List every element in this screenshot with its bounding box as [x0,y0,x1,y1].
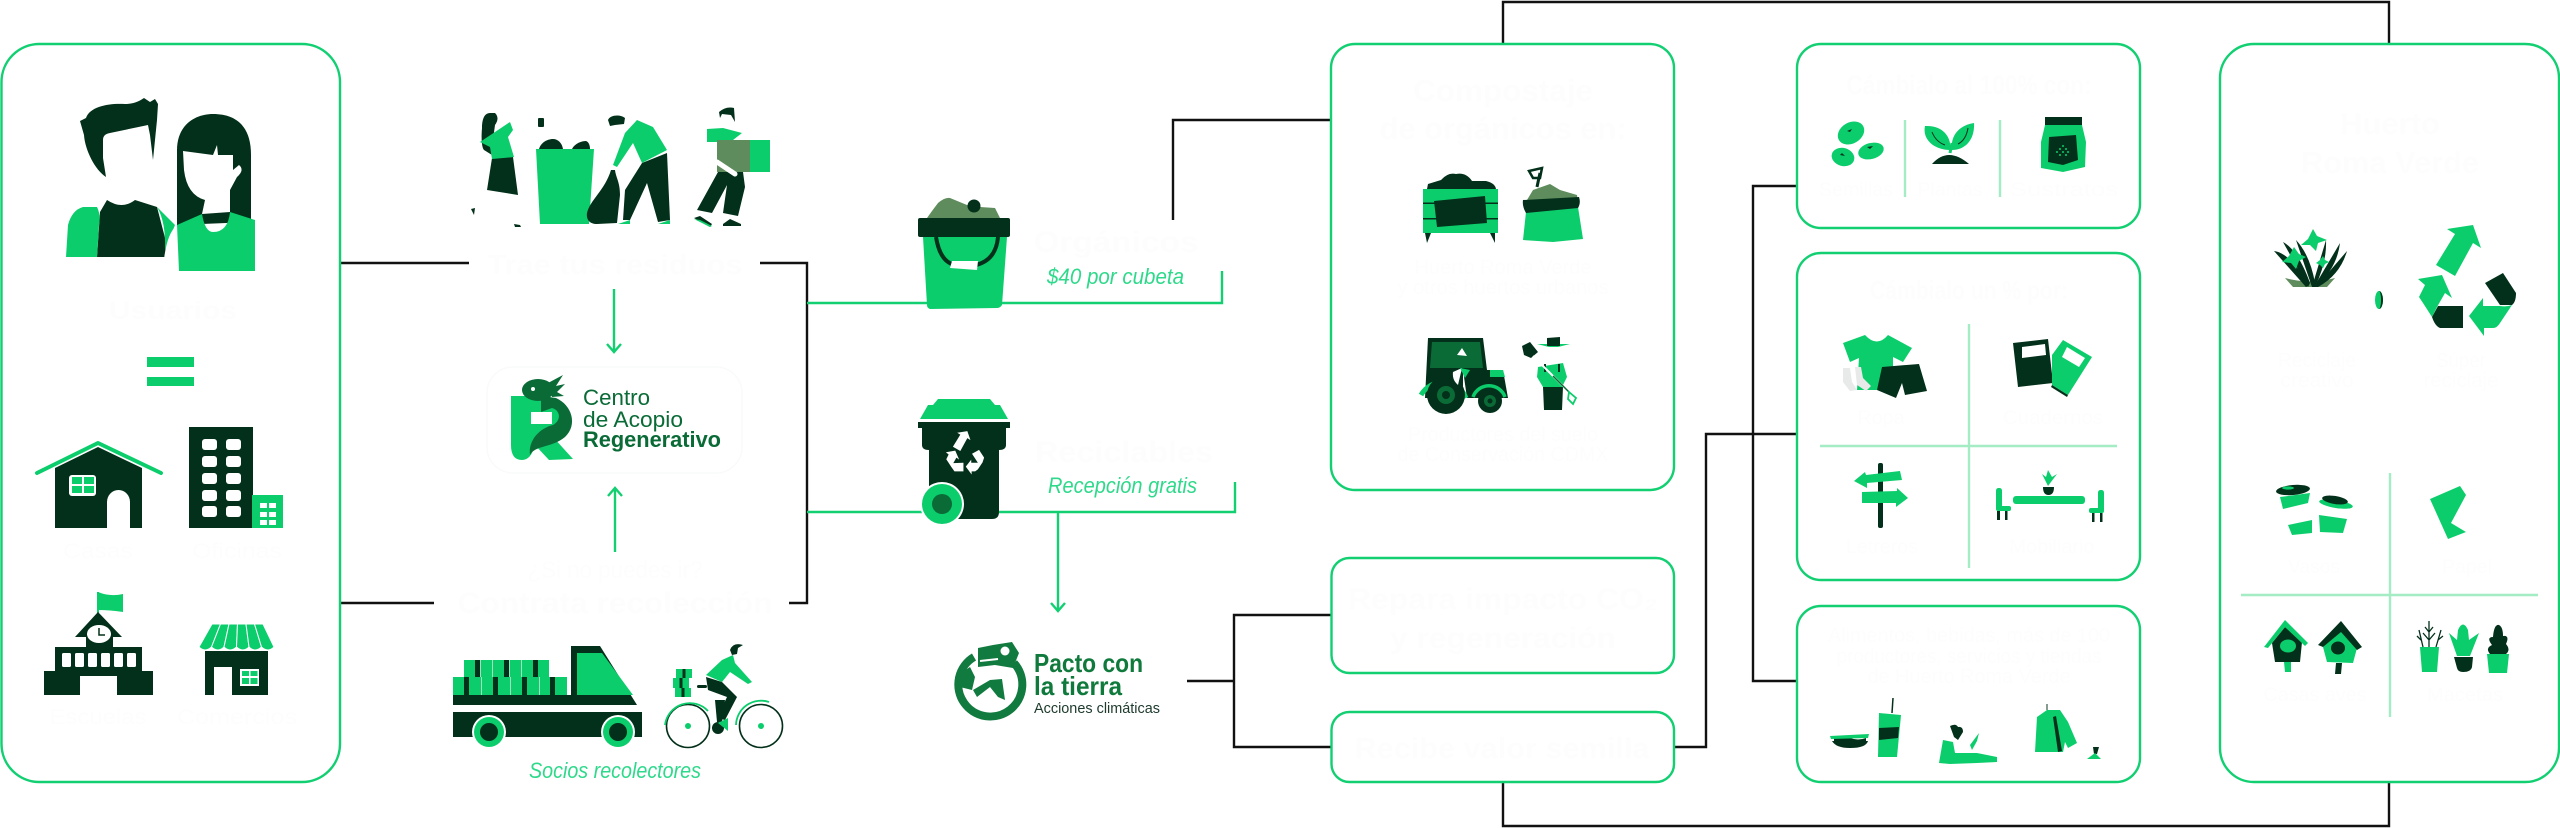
icon: man and woman [66,98,255,271]
label: reciclaje creativo: creativo [2280,370,2354,392]
logo text: Centro [583,385,650,410]
logo text: Acciones climáticas [1034,700,1160,717]
label: huerto roma verde: Huerto Roma Verde [1414,257,1592,279]
label: macetas: Macetas [2427,685,2503,706]
label: papel: Papel [2442,557,2492,578]
panel: cambialo un porcentaje [1797,253,2140,580]
heading: huerto roma verde [2301,106,2479,180]
icon: compost crate [1423,174,1498,243]
panel: huerto roma verde [2220,44,2559,782]
label: productores [1398,424,1608,466]
heading: huerto roma verde: Roma Verde [2301,145,2479,180]
logo: pacto con la tierra [955,642,1160,717]
panel: reparto [1332,558,1674,673]
labels: semillas plantas sustratos: Semillas [1819,180,1893,201]
label: comercios: Comercios [177,706,297,729]
panel: cambialo al 100 [1797,44,2140,228]
heading: trae tus residuos: Trae tus residuos [488,249,742,280]
icon: office building [189,427,283,528]
icon: signpost [1854,463,1908,528]
logo text: de Acopio [583,407,683,432]
logo: centro de acopio regenerativo [487,367,742,473]
caption: socios recolectores: Socios recolectores [529,758,701,783]
label: ropa: Ropa [1858,408,1905,429]
label: organicos [1034,226,1198,289]
heading: cambialo por: Cámbialo un % por: [1870,275,2068,305]
icon: substrate bag [2041,117,2086,172]
label: huerto roma verde [1398,257,1608,299]
price: 40 por cubeta: $40 por cubeta [1046,264,1184,289]
icon: flowering plant [2274,229,2347,287]
logo text [1034,648,1160,717]
label: super reciclaje: Súper [2436,350,2486,372]
logo text: Regenerativo [583,427,721,452]
label: huerto roma verde: y otros huertos urbanos [1398,277,1608,299]
connector lines: black flow [340,2,2389,826]
note: recepcion gratis: Recepción gratis [1048,473,1197,498]
logo text: Pacto con [1034,648,1143,678]
labels: semillas plantas sustratos: Plantas [1918,180,1982,201]
label: super reciclaje: reciclaje [2424,370,2498,392]
heading: contrata recoleccion: Contrata recolección [458,587,772,620]
text: repara impacto: Repara impacto CO₂ [1348,583,1658,616]
icon: school [44,592,153,695]
icon: shop [199,624,274,695]
heading: huerto roma verde: Huerto [2340,106,2440,141]
label: escuelas: Escuelas [50,706,146,729]
icon: notebooks [2013,339,2092,397]
label: reciclables: Reciclables [1035,436,1213,469]
label: productores: Productores del suelo [1408,424,1598,446]
icon: seedling [1925,123,1974,164]
labels: semillas plantas sustratos: Sustratos [2010,180,2118,201]
heading: compostaje [1380,73,1626,146]
labels: semillas plantas sustratos [1819,180,2118,201]
label: reciclaje creativo: Reciclaje [2278,350,2356,372]
icon: farmer with shovel [1522,337,1576,410]
icon: tractor [1421,338,1508,414]
icon: jacket and lamp [2035,704,2101,759]
label: cuadernos: Cuadernos [2003,408,2103,429]
icon: beans [1830,117,1886,169]
label: mobiliario: Mobiliario [2010,537,2094,558]
text: repara impacto: y regeneración [1390,622,1616,655]
panel: recibe valor [1332,712,1674,782]
icon: compost sack [1523,168,1583,242]
heading: usuarios: Usuarios [109,297,237,325]
text: recibe valor semilla: Recibe valor semilla [1354,733,1650,765]
icon: sandwich and cup [1830,698,1901,757]
icon: person reading [1939,725,1997,764]
label: reciclaje creativo [2278,350,2356,392]
logo emblem [511,375,573,460]
icon: house [37,443,161,528]
icon: birdhouses [2264,620,2362,674]
text: alimentos [1828,625,2110,688]
icon: recycling arrows [2418,225,2516,336]
connector lines: green flow [607,271,1235,611]
text: alimentos: Alimentos, bebidas, más de 100 [1828,625,2110,647]
heading: cambialo al 100: Cámbialo al 100% con: [1846,70,2092,100]
label: letreros: Letreros [1846,537,1918,558]
label: oficinas: Oficinas [192,540,282,563]
panel: compostaje de organicos [1331,44,1674,490]
illustration: cyclist [665,644,782,748]
icon: coffee cups [2276,484,2353,535]
icon: clothes [1843,335,1927,398]
label: vasos: Vasos [2288,557,2340,578]
illustration: people bringing waste [471,108,770,227]
panel: usuarios [2,44,340,782]
heading: compostaje: Compostaje [1413,73,1593,108]
text: alimentos: productores, servicios y tiendas [1836,646,2102,668]
heading: compostaje: de orgánicos en: [1380,111,1626,146]
icon: recycling bin [918,399,1010,526]
label: super reciclaje [2424,350,2498,392]
text: alimentos: de Huerto Roma Verde [1868,666,2070,688]
icon: compost bucket [918,198,1010,309]
logo text [583,385,721,452]
label: organicos: Orgánicos [1034,226,1198,259]
icon: potted plants [2417,621,2509,673]
icon: paper [2430,486,2466,539]
label: casas: Casas [63,540,133,563]
heading: contrata recoleccion: ¿Si no puedes ir? [528,557,702,584]
logo text: la tierra [1034,671,1122,701]
icon: furniture [1996,470,2104,522]
label: reciclables [1035,436,1213,498]
label: casas aves: Casas aves [2264,685,2366,706]
illustration: truck [453,646,642,749]
icon: equals sign [147,357,194,386]
label: productores: de Conservación CDMX [1398,444,1608,466]
panel: alimentos y productos [1797,606,2140,782]
text: repara impacto [1348,583,1658,655]
logo emblem: earth dragon [955,642,1022,717]
heading: contrata recoleccion [458,557,772,620]
icon: small pod [2375,291,2383,309]
